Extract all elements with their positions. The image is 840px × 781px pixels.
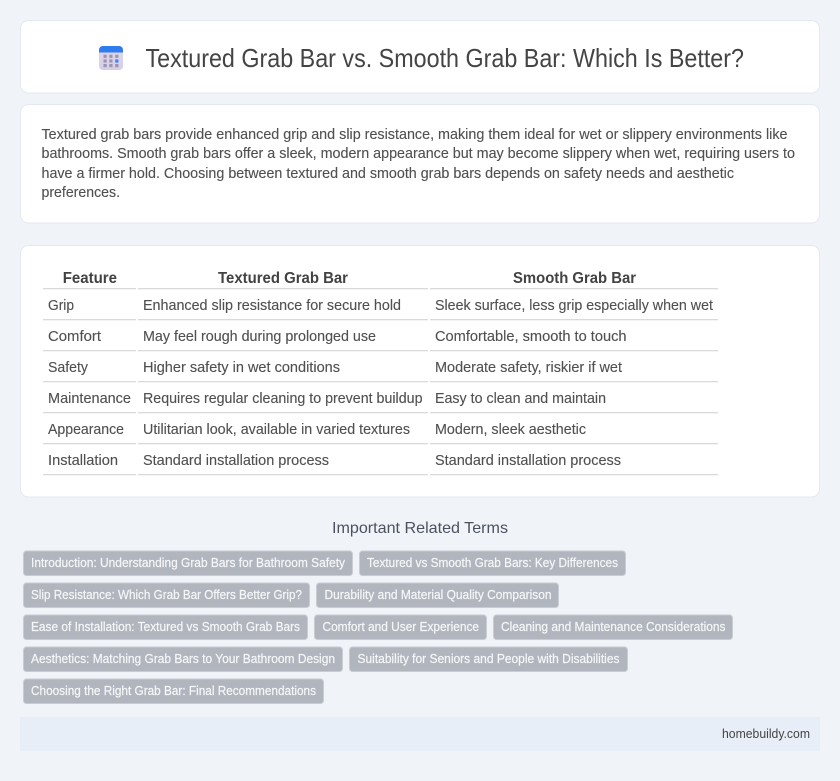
row: appearance: Modern, sleek aesthetic [435, 422, 586, 438]
tag [24, 679, 324, 704]
row: safety: Safety [48, 360, 89, 376]
row: comfort: Comfort [48, 329, 101, 345]
table header row: Smooth Grab Bar [513, 270, 636, 287]
heading: important related terms: Important Related Terms [332, 520, 508, 537]
panel: introduction text: preferences. [42, 185, 120, 201]
footer [20, 717, 820, 751]
tag: Comfort and User Experience [322, 620, 479, 634]
tag: Durability and Material Quality Comparison [324, 588, 552, 602]
tag [350, 647, 628, 672]
tag: Ease of Installation: Textured vs Smooth Grab Bars [31, 620, 300, 634]
panel: introduction text: bathrooms. Smooth grab bars offer a sleek, modern appearance but may become slippery when wet, requiring users to [42, 146, 795, 162]
row: comfort: May feel rough during prolonged use [143, 329, 376, 345]
row: maintenance [48, 391, 606, 407]
tag [316, 583, 558, 608]
table header row: Feature [63, 270, 117, 287]
panel: introduction text: Textured grab bars provide enhanced grip and slip resistance, making them ideal for wet or slippery environments like [42, 127, 788, 143]
row: maintenance: Requires regular cleaning to prevent buildup [143, 391, 422, 407]
row: appearance: Utilitarian look, available in varied textures [143, 422, 410, 438]
tag: Textured vs Smooth Grab Bars: Key Differences [367, 556, 618, 570]
row: appearance: Appearance [48, 422, 124, 438]
row: comfort: Comfortable, smooth to touch [435, 329, 626, 345]
row: grip [48, 298, 713, 314]
row: installation: Standard installation process [143, 453, 329, 469]
tag [24, 551, 352, 576]
row: maintenance: Easy to clean and maintain [435, 391, 606, 407]
tag: Suitability for Seniors and People with Disabilities [358, 652, 620, 666]
tag: Choosing the Right Grab Bar: Final Recommendations [31, 684, 316, 698]
row: installation [48, 453, 621, 469]
row: safety: Moderate safety, riskier if wet [435, 360, 622, 376]
row: installation: Installation [48, 453, 118, 469]
tag [24, 615, 308, 640]
row: comfort [48, 329, 626, 345]
row: safety [48, 360, 622, 376]
table header row [63, 270, 636, 287]
row: maintenance: Maintenance [48, 391, 131, 407]
row: grip: Sleek surface, less grip especially when wet [435, 298, 713, 314]
tag: Introduction: Understanding Grab Bars for Bathroom Safety [31, 556, 346, 570]
tag [494, 615, 732, 640]
row: grip: Grip [48, 298, 74, 314]
row: installation: Standard installation process [435, 453, 621, 469]
table header row: Textured Grab Bar [218, 270, 348, 287]
tag [24, 583, 310, 608]
title: Textured Grab Bar vs. Smooth Grab Bar: Which Is Better? [146, 45, 744, 73]
tag: Aesthetics: Matching Grab Bars to Your Bathroom Design [31, 652, 335, 666]
panel: header [20, 20, 820, 93]
panel: related term tags [24, 551, 732, 704]
tag [24, 647, 342, 672]
panel: introduction text: have a firmer hold. Choosing between textured and smooth grab bars depends on safety needs and aesthetic [42, 166, 734, 182]
tag: Slip Resistance: Which Grab Bar Offers Better Grip? [31, 588, 302, 602]
row: grip: Enhanced slip resistance for secure hold [143, 298, 401, 314]
icon: calendar [99, 46, 123, 70]
row: appearance [48, 422, 586, 438]
tag [360, 551, 626, 576]
tag: Cleaning and Maintenance Considerations [501, 620, 726, 634]
tag [314, 615, 486, 640]
footer: homebuildy.com [722, 726, 810, 741]
panel: comparison table [20, 246, 820, 497]
row: safety: Higher safety in wet conditions [143, 360, 340, 376]
panel: introduction text [20, 104, 820, 223]
